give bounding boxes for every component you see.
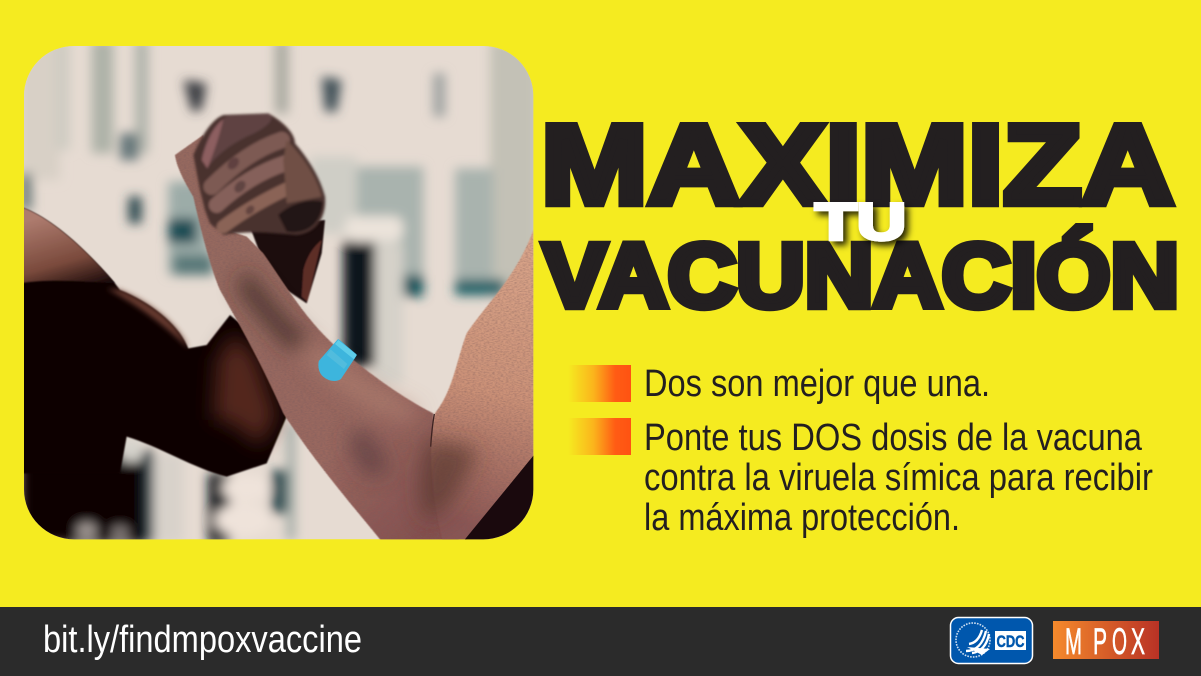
bullet marker 1: [568, 365, 631, 402]
footer link: bit.ly/findmpoxvaccine: [43, 619, 362, 661]
title connector word: TU: [815, 194, 906, 252]
arm shading: [237, 270, 477, 520]
fist: [193, 113, 325, 235]
footer bar: [0, 607, 1201, 676]
logo: MPOX: X: [1131, 621, 1145, 662]
right arm (lit): [175, 135, 537, 543]
title line 2: VACUNACIÓN: [543, 226, 1179, 326]
logo: MPOX: P: [1093, 621, 1107, 662]
logo: CDC: CDC: [996, 632, 1024, 651]
text: first message: Dos son mejor que una.: [644, 363, 990, 405]
text: second message: [644, 417, 1153, 539]
photo: two clasped arms in a gym: [20, 40, 538, 543]
logo: MPOX: O: [1112, 621, 1127, 662]
text: second message: la máxima protección.: [644, 497, 960, 539]
raised hand behind: [250, 220, 325, 303]
logo: MPOX: M: [1065, 621, 1082, 662]
logo: CDC: [950, 618, 1032, 664]
title: MAXIMIZA TU VACUNACIÓN: [541, 102, 1179, 326]
title line 1: MAXIMIZA: [541, 102, 1174, 228]
bandage: [320, 340, 357, 380]
logo: MPOX: [1053, 621, 1159, 662]
bullet marker 2: [568, 418, 631, 455]
left arm (in shadow): [20, 207, 287, 477]
